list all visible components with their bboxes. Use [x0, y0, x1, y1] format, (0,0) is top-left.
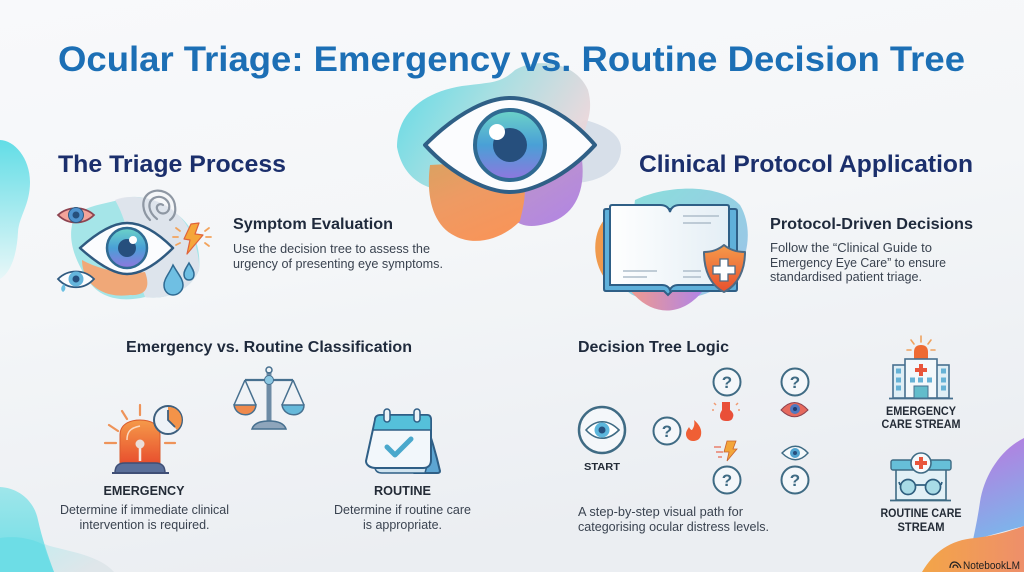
text block: protocol-driven decisions: Protocol-Driven Decisions	[770, 216, 973, 233]
text block: emergency description: Determine if immediate clinical	[60, 503, 229, 517]
icon: clear eye	[782, 446, 808, 460]
icon: central eye with colour blobs	[397, 63, 621, 241]
heading: Clinical Protocol Application: Clinical Protocol Application	[639, 151, 973, 178]
text block: routine description	[334, 503, 471, 532]
icon: flame	[686, 420, 701, 441]
text block: symptom evaluation: urgency of presenting eye symptoms.	[233, 257, 443, 271]
heading: Decision Tree Logic: Decision Tree Logic	[578, 339, 729, 356]
icon: balance scales	[234, 367, 304, 429]
icon: routine calendar	[366, 409, 440, 473]
icon: thermometer	[712, 402, 740, 421]
decorative blob: left edge	[0, 140, 30, 279]
icon: emergency hospital	[889, 336, 953, 398]
label: routine care stream: ROUTINE CARE	[880, 508, 962, 520]
label: emergency care stream: EMERGENCY	[886, 406, 956, 418]
node: lower right question	[782, 466, 808, 494]
text block: symptom evaluation: Symptom Evaluation	[233, 216, 393, 233]
node: lower question	[714, 466, 740, 494]
lightning bolt	[173, 223, 211, 254]
node: upper right question	[782, 368, 808, 396]
text block: decision tree description	[578, 505, 769, 534]
icon: red eye	[781, 402, 808, 417]
node: upper question	[714, 368, 740, 396]
heading: The Triage Process: The Triage Process	[58, 151, 286, 178]
node: first question	[654, 418, 680, 444]
decorative blob: bottom left	[0, 487, 114, 572]
text block: protocol-driven decisions: Follow the “Clinical Guide to	[770, 241, 932, 255]
NotebookLM watermark: NotebookLM	[963, 560, 1020, 572]
decorative blob: bottom right	[922, 438, 1024, 572]
text block: protocol-driven decisions	[770, 216, 973, 284]
node: first question: ?	[662, 422, 672, 441]
watering eye	[58, 272, 94, 292]
text block: protocol-driven decisions: Emergency Eye Care” to ensure	[770, 256, 946, 270]
label: routine: ROUTINE	[374, 484, 431, 498]
text block: routine description: Determine if routine care	[334, 503, 471, 517]
label: routine care stream: STREAM	[898, 522, 944, 534]
icon: bolt	[714, 441, 737, 461]
icon: routine optical clinic	[890, 453, 951, 500]
spiral dizziness	[143, 191, 175, 220]
icon: emergency siren and clock	[105, 405, 182, 473]
text block: protocol-driven decisions: standardised patient triage.	[770, 270, 922, 284]
node: lower question: ?	[722, 471, 732, 490]
text block: decision tree description: A step-by-step visual path for	[578, 505, 743, 519]
text block: routine description: is appropriate.	[363, 518, 442, 532]
label: emergency: EMERGENCY	[104, 484, 185, 498]
label: start: START	[584, 461, 621, 473]
text block: emergency description	[60, 503, 229, 532]
label: emergency care stream	[882, 406, 960, 431]
node: lower right question: ?	[790, 471, 800, 490]
label: emergency care stream: CARE STREAM	[882, 419, 960, 431]
tear drops	[164, 263, 194, 295]
decision tree diagram	[579, 368, 808, 494]
central eye	[80, 223, 173, 274]
heading: Emergency vs. Routine Classification: Emergency vs. Routine Classification	[126, 339, 412, 356]
text block: symptom evaluation	[233, 216, 443, 271]
icon: protocol book with shield	[595, 189, 748, 311]
node: start eye	[579, 407, 625, 453]
node: upper right question: ?	[790, 373, 800, 392]
label: routine care stream	[880, 508, 962, 534]
title: Ocular Triage: Emergency vs. Routine Decision Tree	[58, 40, 965, 79]
text block: emergency description: intervention is required.	[80, 518, 210, 532]
text block: symptom evaluation: Use the decision tree to assess the	[233, 242, 430, 256]
icon: symptom evaluation cluster	[58, 191, 211, 299]
node: upper question: ?	[722, 373, 732, 392]
red eye	[58, 208, 94, 222]
text block: decision tree description: categorising ocular distress levels.	[578, 520, 769, 534]
